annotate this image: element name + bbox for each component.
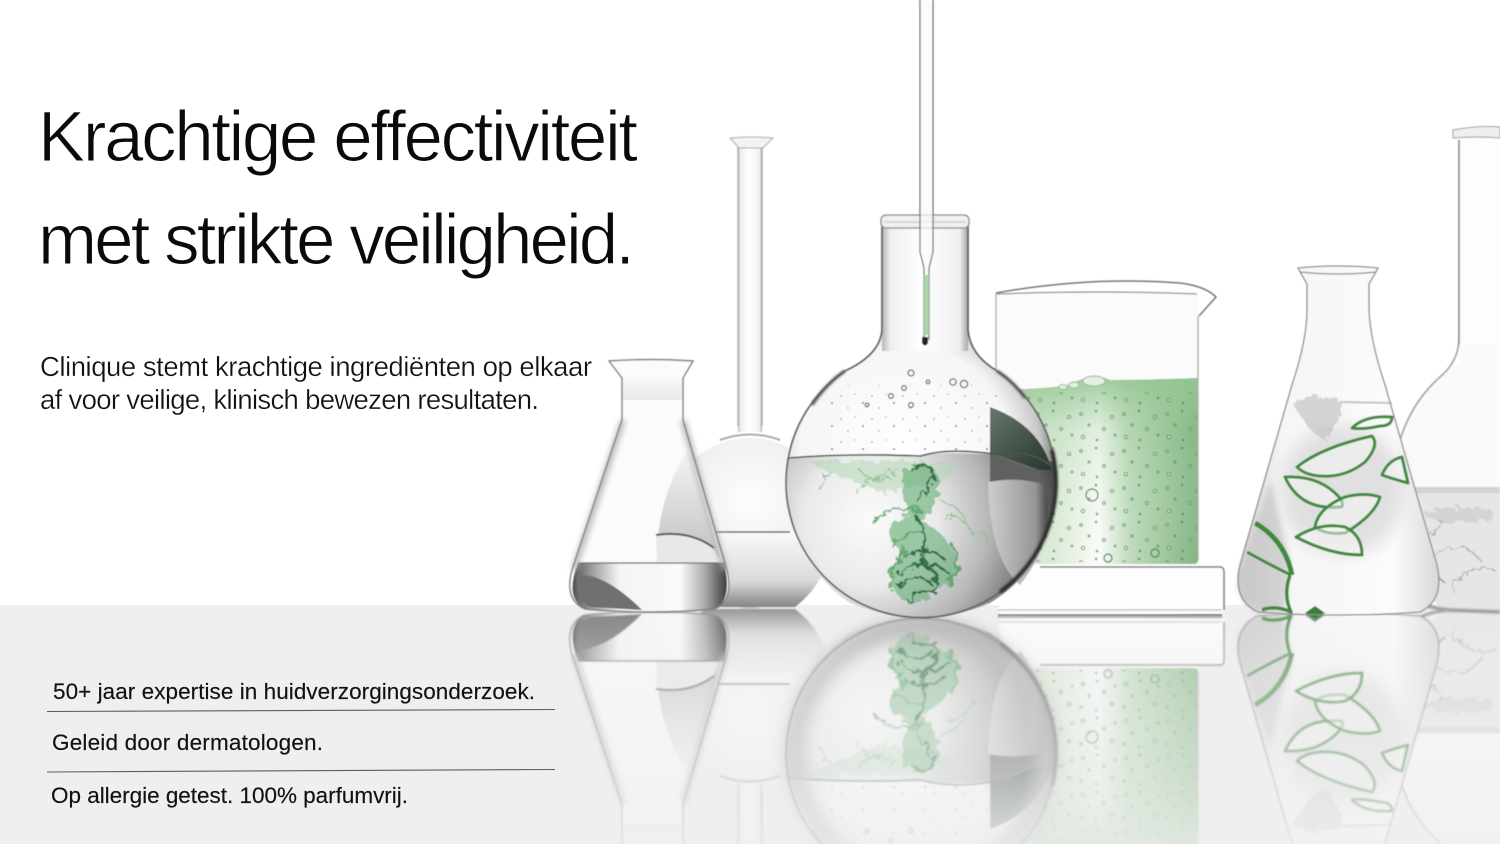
claim: allergy tested: Op allergie getest. 100% parfumvrij. xyxy=(51,783,408,808)
claim: dermatologists: Geleid door dermatologen. xyxy=(52,730,323,755)
background: reflective table xyxy=(0,605,1500,844)
title: Krachtige effectiviteit xyxy=(38,98,638,177)
reflections of the glassware on the table xyxy=(560,605,1500,844)
intro text: Clinique stemt krachtige ingrediënten op elkaar xyxy=(40,351,592,382)
claim: expertise: 50+ jaar expertise in huidverzorgingsonderzoek. xyxy=(53,679,535,704)
intro text xyxy=(40,351,592,415)
claims list xyxy=(47,679,555,808)
title xyxy=(38,98,638,280)
title: met strikte veiligheid. xyxy=(38,201,635,280)
intro text: af voor veilige, klinisch bewezen resultaten. xyxy=(40,384,539,415)
glassware group xyxy=(570,0,1500,618)
background: white wall xyxy=(0,0,1500,605)
